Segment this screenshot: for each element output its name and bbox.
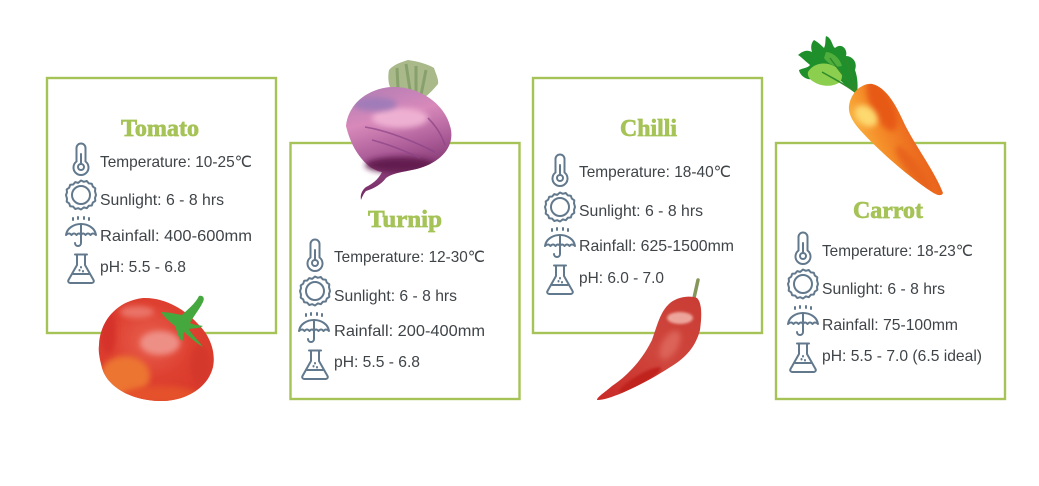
icon: umbrella — [545, 228, 575, 257]
turnip card border — [290, 143, 520, 399]
tomato heading: Tomato — [121, 116, 199, 142]
pH text: pH: 6.0 - 7.0 — [579, 270, 664, 287]
illustration: carrot — [798, 36, 943, 198]
sunlight text: Sunlight: 6 - 8 hrs — [822, 281, 945, 298]
illustration: tomato — [99, 296, 214, 404]
chilli card border — [533, 78, 762, 333]
icon: sun — [66, 180, 96, 210]
tomato card border — [47, 78, 276, 333]
icon: thermometer — [74, 144, 88, 175]
sunlight text: Sunlight: 6 - 8 hrs — [579, 203, 703, 220]
rainfall text: Rainfall: 200-400mm — [334, 323, 485, 340]
icon: umbrella — [299, 313, 329, 342]
illustration: chilli — [597, 280, 701, 400]
carrot card border — [776, 143, 1005, 399]
rainfall text: Rainfall: 75-100mm — [822, 317, 958, 334]
icon: sun — [545, 192, 575, 222]
icon: flask — [547, 266, 573, 294]
temperature text: Temperature: 18-40℃ — [579, 164, 731, 181]
icon: flask — [790, 344, 816, 372]
icon: thermometer — [552, 154, 568, 186]
temperature text: Temperature: 18-23℃ — [822, 243, 973, 260]
panel: tomato — [47, 78, 276, 404]
icon: sun — [300, 276, 330, 306]
icon: sun — [788, 270, 818, 298]
pH text: pH: 5.5 - 7.0 (6.5 ideal) — [822, 348, 982, 365]
icon: thermometer — [308, 240, 322, 271]
sunlight text: Sunlight: 6 - 8 hrs — [334, 288, 457, 305]
sunlight text: Sunlight: 6 - 8 hrs — [100, 192, 224, 209]
icon: umbrella — [788, 306, 818, 335]
illustration: turnip — [346, 60, 451, 200]
rainfall text: Rainfall: 400-600mm — [100, 228, 252, 245]
temperature text: Temperature: 10-25℃ — [100, 154, 252, 171]
panel: carrot — [776, 36, 1005, 399]
icon: flask — [302, 350, 328, 379]
rainfall text: Rainfall: 625-1500mm — [579, 238, 734, 255]
temperature text: Temperature: 12-30℃ — [334, 249, 485, 266]
carrot heading: Carrot — [853, 198, 923, 224]
pH text: pH: 5.5 - 6.8 — [334, 354, 420, 371]
turnip heading: Turnip — [368, 207, 442, 233]
icon: thermometer — [796, 232, 810, 264]
chilli heading: Chilli — [620, 116, 677, 142]
panel: turnip — [290, 60, 520, 399]
icon: flask — [68, 254, 94, 283]
pH text: pH: 5.5 - 6.8 — [100, 259, 186, 276]
icon: umbrella — [66, 217, 96, 246]
panel: chilli — [533, 78, 762, 400]
